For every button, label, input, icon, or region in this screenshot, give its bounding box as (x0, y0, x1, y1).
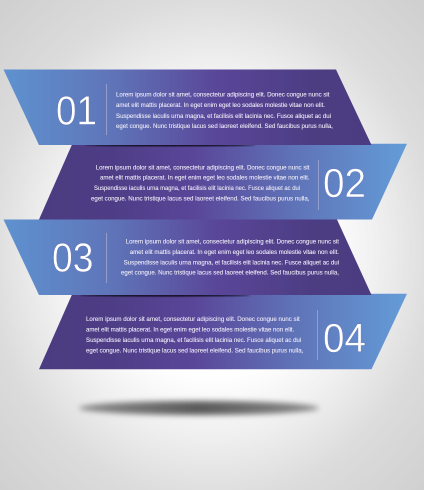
band 03 shape (4, 220, 372, 295)
panel 03 (4, 220, 372, 295)
text block 04: Lorem ipsum dolor sit amet, consectetur adipiscing elit. Donec congue nunc sit (86, 316, 300, 323)
text block 04: Suspendisse iaculis urna magna, et facilisis elit lacinia nec. Fusce aliquet ac dui (86, 337, 302, 344)
band 02 shape (39, 144, 407, 220)
band 04 shape (39, 294, 407, 369)
divider 04 (316, 310, 319, 360)
text block 01: eget congue. Nunc tristique lacus sed laoreet eleifend. Sed faucibus purus nulla, (116, 123, 333, 130)
band 01 shape (4, 70, 372, 145)
number 02: 02 (323, 160, 366, 206)
panel 02 (39, 144, 407, 220)
panel 04 (39, 294, 407, 369)
text block 03: Lorem ipsum dolor sit amet, consectetur adipiscing elit. Donec congue nunc sit (126, 238, 339, 245)
text block 03: amet elit mattis placerat. In eget enim eget leo sodales molestie vitae non elit. (130, 249, 339, 256)
text block 03: Suspendisse iaculis urna magna, et facilisis elit lacinia nec. Fusce aliquet ac dui (124, 259, 339, 266)
text block 03 (121, 238, 339, 277)
divider 01 (105, 84, 108, 135)
ground shadow (79, 401, 319, 415)
text block 02 (91, 164, 310, 203)
crease shadow 04 (80, 295, 250, 297)
crease shadow 02 (85, 144, 255, 146)
text block 02: Lorem ipsum dolor sit amet, consectetur adipiscing elit. Donec congue nunc sit (96, 164, 310, 171)
text block 04: amet elit mattis placerat. In eget enim eget leo sodales molestie vitae non elit. (86, 327, 294, 334)
divider 03 (105, 233, 108, 283)
text block 02: Suspendisse iaculis urna magna, et facilisis elit lacinia nec. Fusce aliquet ac dui (94, 185, 300, 192)
text block 03: eget congue. Nunc tristique lacus sed laoreet eleifend. Sed faucibus purus nulla, (121, 270, 339, 277)
panel 01 (4, 70, 372, 145)
text block 01: Lorem ipsum dolor sit amet, consectetur adipiscing elit. Donec congue nunc sit (116, 92, 330, 99)
text block 01: Suspendisse iaculis urna magna, et facilisis elit lacinia nec. Fusce aliquet ac dui (116, 113, 331, 120)
text block 02: eget congue. Nunc tristique lacus sed laoreet eleifend. Sed faucibus purus nulla, (91, 196, 310, 203)
divider 02 (317, 160, 320, 210)
text block 01: amet elit mattis placerat. In eget enim eget leo sodales molestie vitae non elit. (116, 102, 325, 109)
number 01: 01 (56, 88, 97, 134)
text block 04: eget congue. Nunc tristique lacus sed laoreet eleifend. Sed faucibus purus nulla, (86, 347, 303, 354)
text block 01 (116, 92, 333, 130)
text block 04 (86, 316, 303, 354)
text block 02: amet elit mattis placerat. In eget enim eget leo sodales molestie vitae non elit. (100, 175, 310, 182)
number 03: 03 (52, 234, 94, 280)
number 04: 04 (323, 315, 366, 361)
